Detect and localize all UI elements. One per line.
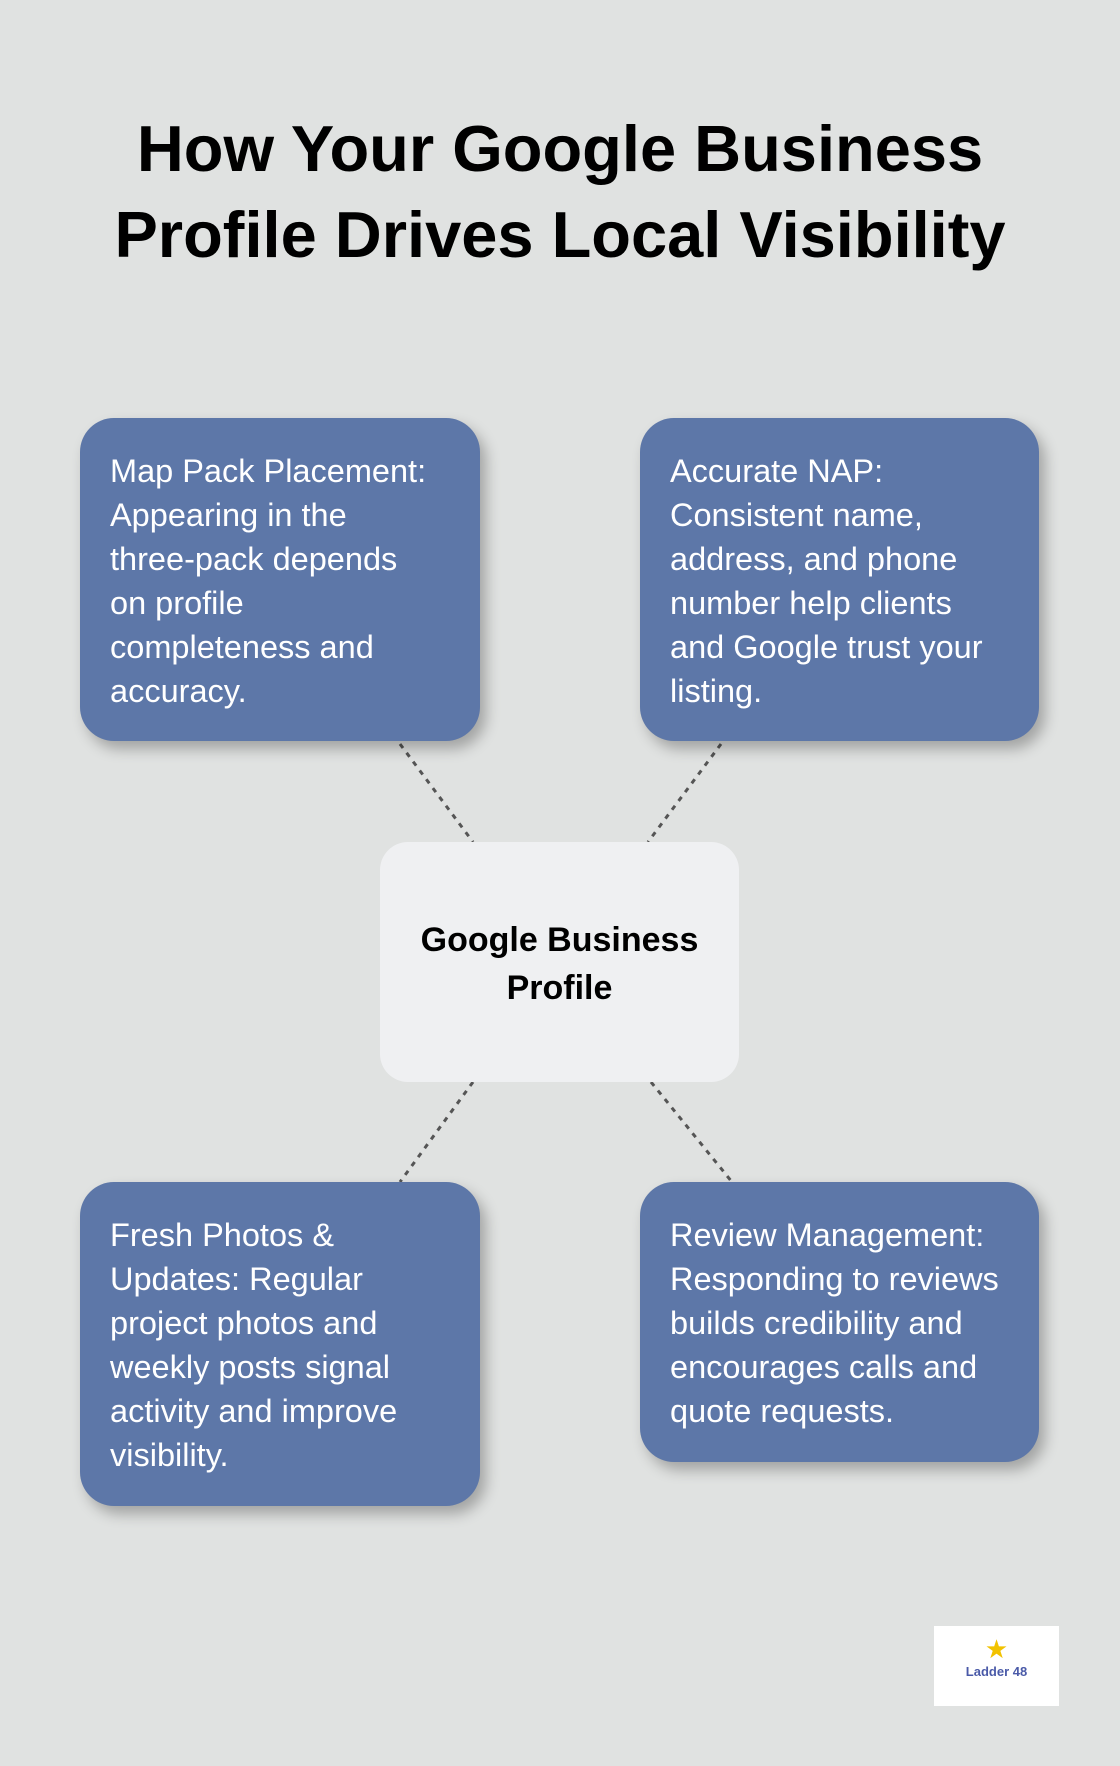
panel: NAP: number help clients xyxy=(670,585,952,621)
panel: map pack: completeness and xyxy=(110,629,374,665)
panel: NAP: address, and phone xyxy=(670,541,957,577)
title: How Your Google Business xyxy=(137,112,983,185)
panel: NAP: Consistent name, xyxy=(670,497,923,533)
panel: photos xyxy=(80,1182,480,1506)
panel: reviews: Review Management: xyxy=(670,1217,984,1253)
panel: NAP: listing. xyxy=(670,673,762,709)
panel: map pack: three-pack depends xyxy=(110,541,397,577)
panel: reviews: Responding to reviews xyxy=(670,1261,999,1297)
panel: reviews: quote requests. xyxy=(670,1393,894,1429)
panel: photos: visibility. xyxy=(110,1437,229,1473)
center node: Google Business xyxy=(421,920,698,958)
title: Profile Drives Local Visibility xyxy=(114,198,1006,271)
panel: NAP: Accurate NAP: xyxy=(670,453,883,489)
logo: ★ xyxy=(985,1634,1008,1664)
title xyxy=(114,112,1006,271)
panel: reviews xyxy=(640,1182,1039,1462)
panel: reviews: encourages calls and xyxy=(670,1349,977,1385)
panel: NAP: and Google trust your xyxy=(670,629,983,665)
panel: map pack: Map Pack Placement: xyxy=(110,453,426,489)
center node xyxy=(380,842,739,1082)
panel: photos: project photos and xyxy=(110,1305,377,1341)
panel: map pack xyxy=(80,418,480,741)
panel: photos: Fresh Photos & xyxy=(110,1217,334,1253)
panel: photos: Updates: Regular xyxy=(110,1261,363,1297)
logo xyxy=(934,1626,1059,1706)
panel: map pack: accuracy. xyxy=(110,673,247,709)
panel: photos: weekly posts signal xyxy=(110,1349,390,1385)
logo: Ladder 48 xyxy=(966,1664,1027,1679)
panel: map pack: on profile xyxy=(110,585,244,621)
panel: map pack: Appearing in the xyxy=(110,497,347,533)
panel: photos: activity and improve xyxy=(110,1393,397,1429)
panel: reviews: builds credibility and xyxy=(670,1305,963,1341)
panel: NAP xyxy=(640,418,1039,741)
center node: Profile xyxy=(507,968,612,1006)
